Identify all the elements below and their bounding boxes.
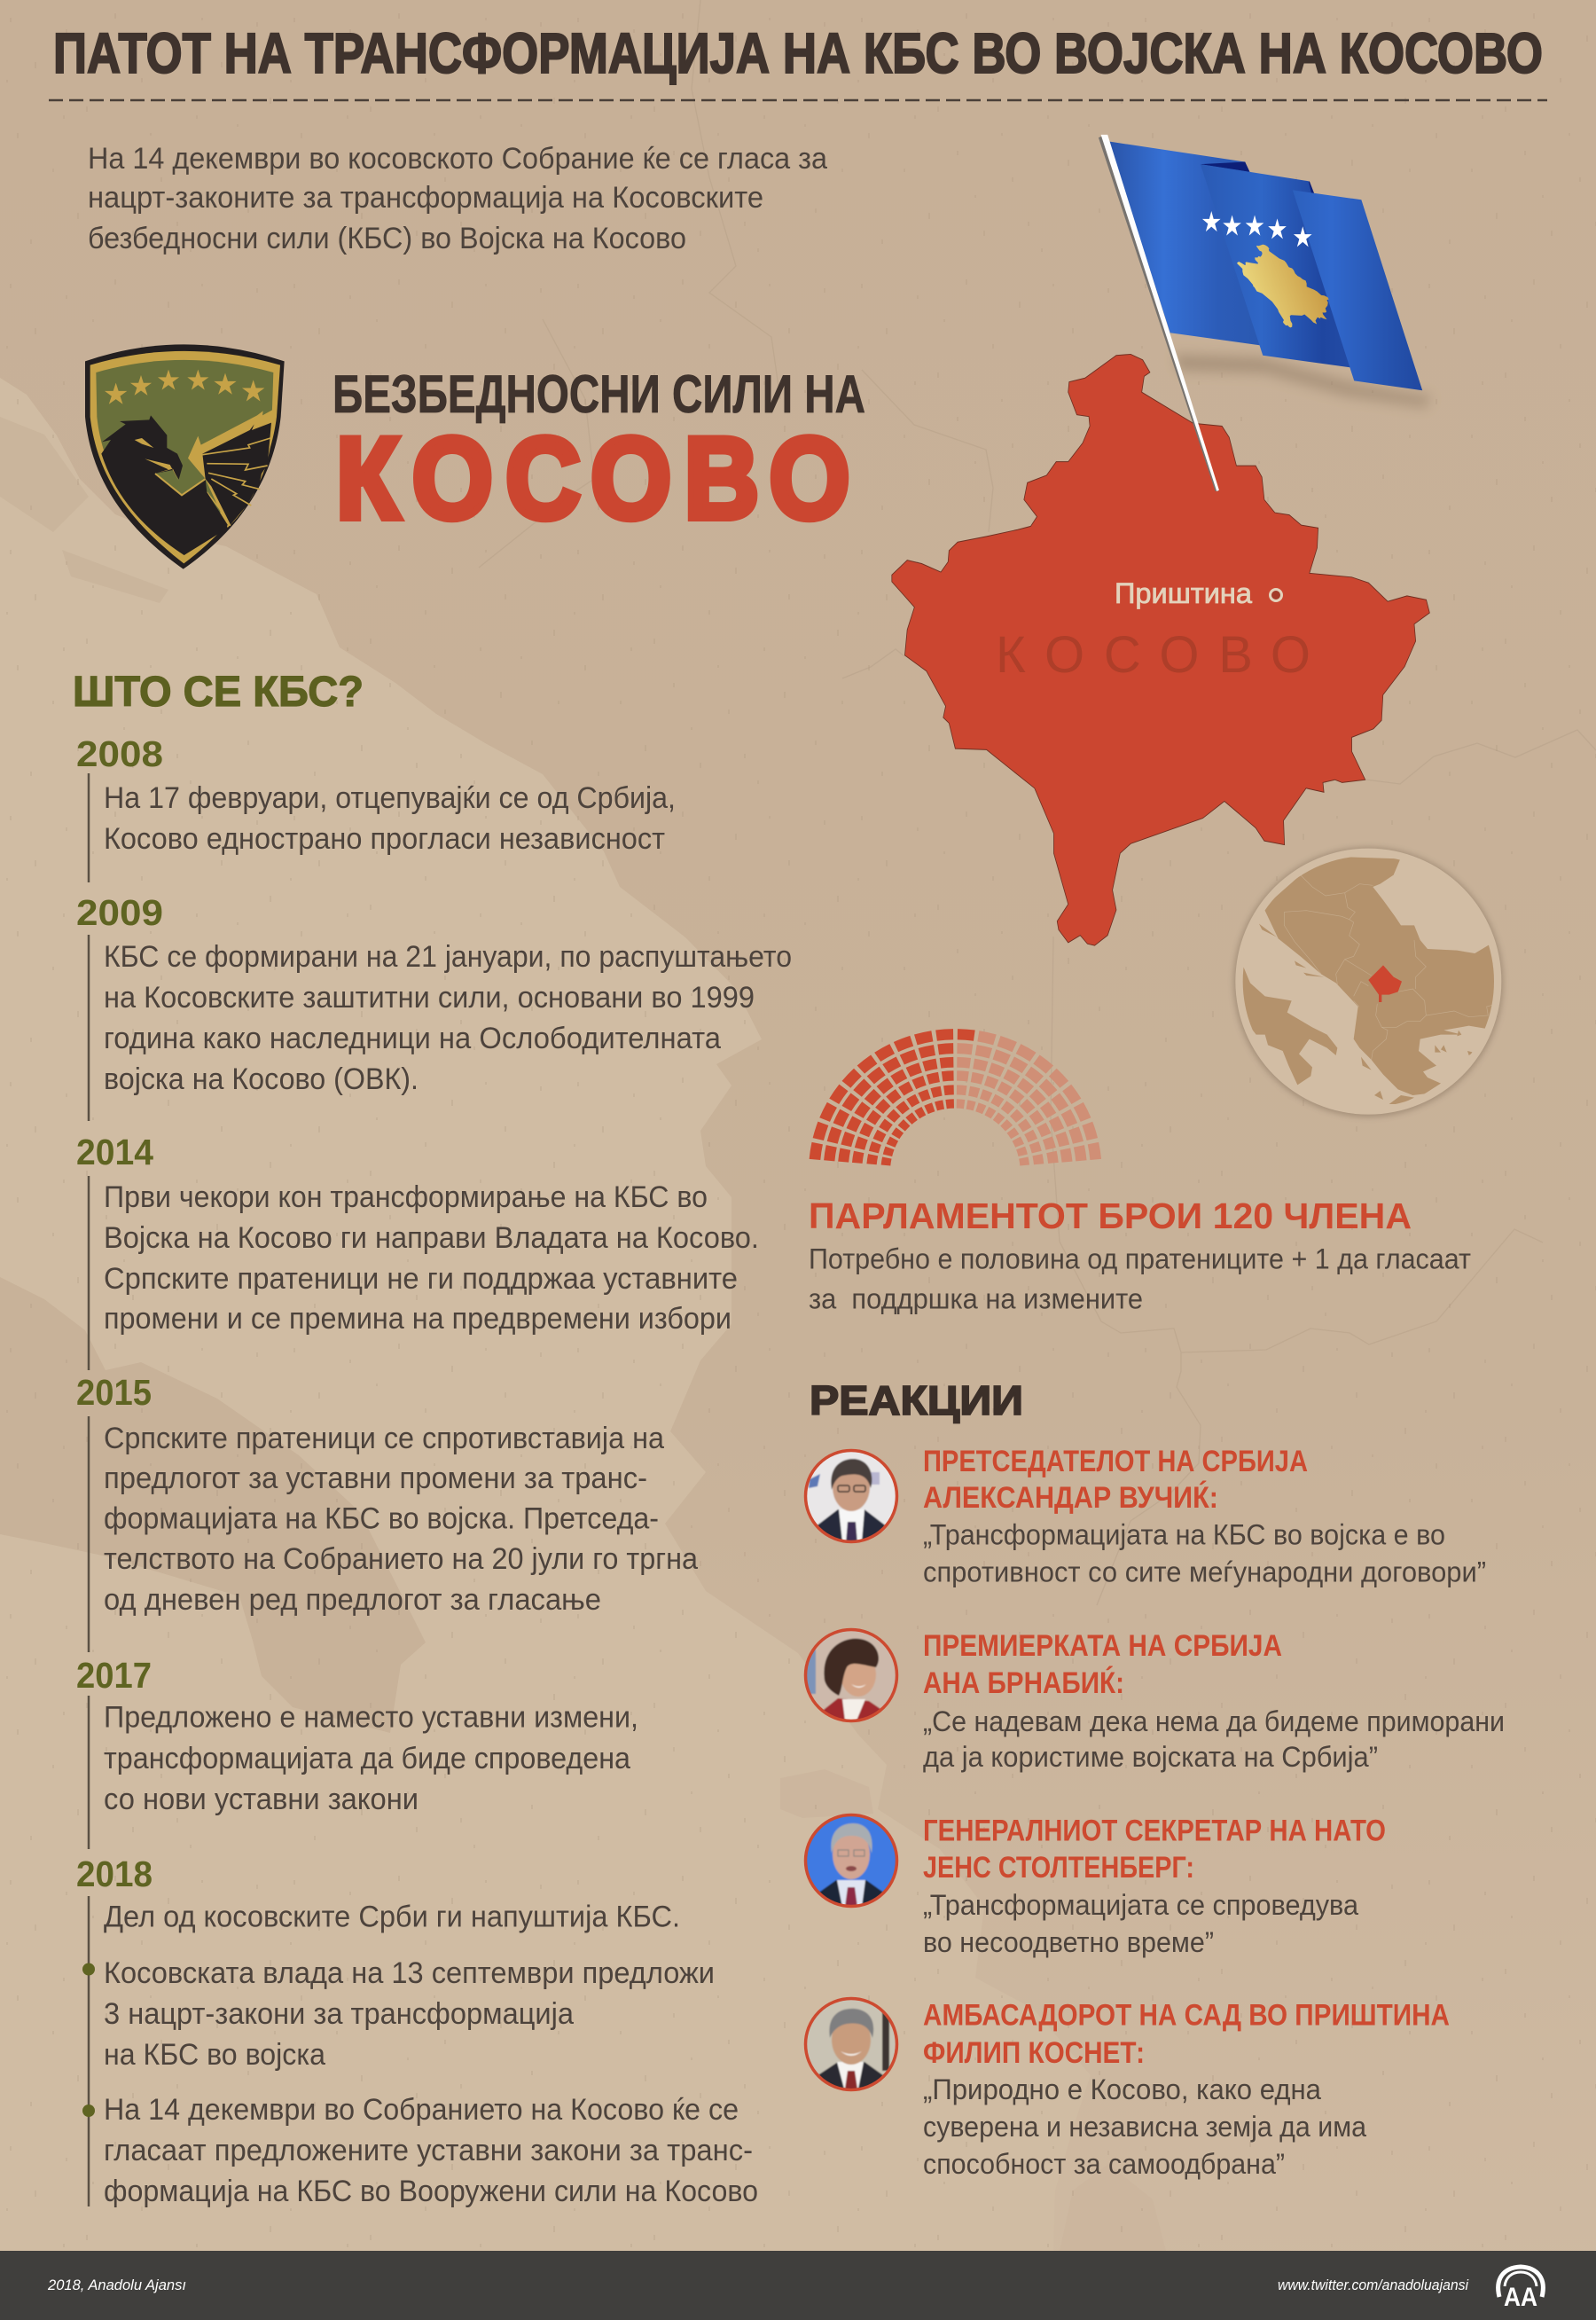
quote: Kosnett — [923, 1999, 1450, 2180]
quote: Stoltenberg: ЈЕНС СТОЛТЕНБЕРГ: — [923, 1851, 1194, 1885]
quote: Brnabić — [923, 1629, 1505, 1773]
parliament text: Потребно е половина од пратениците + 1 да гласаат — [809, 1243, 1471, 1275]
timeline 2018: На 14 декември во Собранието на Косово ќе се — [104, 2093, 739, 2127]
parliament heading: ПАРЛАМЕНТОТ БРОИ 120 ЧЛЕНА — [809, 1195, 1412, 1236]
quote: Stoltenberg: ГЕНЕРАЛНИОТ СЕКРЕТАР НА НАТО — [923, 1814, 1386, 1847]
timeline 2009: војска на Косово (ОВК). — [104, 1062, 419, 1096]
heading: what is KSF: ШТО СЕ КБС? — [73, 669, 364, 716]
icon: AA logo: AA — [1504, 2283, 1537, 2312]
timeline 2017 — [76, 1655, 638, 1849]
quote: Stoltenberg: „Трансформацијата се спроведува — [923, 1889, 1358, 1921]
quote: Kosnett: ФИЛИП КОСНЕТ: — [923, 2036, 1145, 2070]
quote: Vučić: „Трансформацијата на КБС во војска е во — [923, 1518, 1445, 1550]
map: Kosovo with flag — [892, 135, 1434, 945]
intro text: безбедносни сили (КБС) во Војска на Косово — [88, 222, 686, 255]
quote: Vučić: АЛЕКСАНДАР ВУЧИЌ: — [923, 1481, 1218, 1515]
timeline 2008: Косово еднострано прогласи независност — [104, 822, 665, 856]
intro text: нацрт-законите за трансформација на Косовските — [88, 181, 763, 215]
quote: Kosnett: „Природно е Косово, како една — [923, 2073, 1321, 2105]
parliament text — [809, 1243, 1471, 1315]
icon: AA logo — [1498, 2267, 1543, 2312]
quote: Vučić — [923, 1445, 1486, 1588]
timeline 2018: Дел од косовските Срби ги напуштија КБС. — [104, 1901, 680, 1934]
intro text — [88, 142, 827, 255]
reactions heading: РЕАКЦИИ — [810, 1377, 1023, 1423]
intro text: На 14 декември во косовското Собрание ќе се гласа за — [88, 142, 827, 176]
footer bar: www.twitter.com/anadoluajansi — [1278, 2277, 1469, 2293]
portrait: Brnabić — [802, 1626, 900, 1725]
timeline 2017: со нови уставни закони — [104, 1783, 419, 1816]
timeline 2009: КБС се формирани на 21 јануари, по распуштањето — [104, 940, 792, 974]
portrait: Stoltenberg — [802, 1812, 900, 1911]
timeline 2018: на КБС во војска — [104, 2038, 325, 2072]
footer bar — [0, 2251, 1596, 2320]
timeline 2015: предлогот за уставни промени за транс- — [104, 1462, 647, 1495]
timeline 2008 — [76, 733, 676, 882]
quote: Kosnett: АМБАСАДОРОТ НА САД ВО ПРИШТИНА — [923, 1999, 1450, 2033]
timeline 2015: од дневен ред предлогот за гласање — [104, 1583, 601, 1617]
timeline 2015 — [76, 1372, 698, 1652]
label: Kosovo on map: КОСОВО — [996, 626, 1310, 684]
icon: KSF shield emblem — [85, 344, 285, 569]
quote: Stoltenberg: во несоодветно време” — [923, 1926, 1214, 1958]
timeline 2008: 2008 — [76, 733, 163, 774]
timeline 2009: 2009 — [76, 892, 163, 933]
flag shadow — [1174, 356, 1434, 406]
timeline 2018: Косовската влада на 13 септември предложи — [104, 1956, 715, 1990]
timeline 2015: телството на Собранието на 20 јули го тргна — [104, 1542, 698, 1576]
timeline 2009: на Косовските заштитни сили, основани во 1999 — [104, 981, 755, 1015]
quote: Brnabić: АНА БРНАБИЌ: — [923, 1666, 1124, 1700]
portrait: Vučić — [802, 1447, 900, 1548]
label: Pristina: Приштина — [1115, 577, 1252, 609]
timeline 2014 — [76, 1132, 759, 1370]
quote: Vučić: спротивност со сите меѓународни договори” — [923, 1556, 1486, 1588]
quote: Stoltenberg — [923, 1814, 1386, 1958]
timeline 2018 — [76, 1854, 758, 2208]
quote: Kosnett: способност за самоодбрана” — [923, 2148, 1285, 2180]
timeline 2018: 2018 — [76, 1854, 153, 1894]
timeline 2018: гласаат предложените уставни закони за транс- — [104, 2134, 753, 2167]
timeline 2014: промени и се премина на предвремени избори — [104, 1302, 732, 1336]
timeline 2014: Војска на Косово ги направи Владата на Косово. — [104, 1221, 759, 1255]
timeline 2015: формацијата на КБС во војска. Претседа- — [104, 1502, 659, 1536]
quote: Brnabić: ПРЕМИЕРКАТА НА СРБИЈА — [923, 1629, 1282, 1663]
timeline 2017: трансформацијата да биде спроведена — [104, 1742, 630, 1775]
heading: security forces: БЕЗБЕДНОСНИ СИЛИ НА — [332, 364, 865, 424]
timeline 2015: 2015 — [76, 1372, 152, 1413]
timeline 2009: година како наследници на Ослободителната — [104, 1022, 721, 1055]
parliament text: за поддршка на измените — [809, 1283, 1143, 1315]
timeline 2009 — [76, 892, 792, 1121]
chart: parliament seats — [815, 1034, 1096, 1166]
heading: Kosovo: КОСОВО — [336, 414, 863, 543]
Kosovo shape — [892, 354, 1429, 945]
quote: Kosnett: суверена и независна земја да има — [923, 2111, 1366, 2143]
Kosovo flag — [1109, 142, 1422, 390]
timeline 2008: На 17 февруари, отцепувајќи се од Србија, — [104, 781, 676, 815]
quote: Brnabić: „Се надевам дека нема да бидеме приморани — [923, 1705, 1505, 1737]
timeline 2014: Први чекори кон трансформирање на КБС во — [104, 1180, 708, 1214]
locator globe — [1233, 847, 1503, 1117]
timeline 2018: 3 нацрт-закони за трансформација — [104, 1997, 574, 2031]
flag pole — [1099, 135, 1219, 491]
quote: Brnabić: да ја користиме војската на Србија” — [923, 1741, 1378, 1773]
timeline 2017: Предложено е наместо уставни измени, — [104, 1701, 638, 1735]
timeline 2018: формација на КБС во Вооружени сили на Косово — [104, 2175, 758, 2208]
timeline 2015: Српските пратеници се спротивставија на — [104, 1422, 664, 1455]
timeline 2014: Српските пратеници не ги поддржаа уставните — [104, 1262, 738, 1296]
portrait: Kosnett — [802, 1995, 900, 2093]
timeline 2017: 2017 — [76, 1655, 152, 1696]
timeline 2014: 2014 — [76, 1132, 153, 1172]
footer bar: 2018, Anadolu Ajansı — [47, 2277, 186, 2293]
quote: Vučić: ПРЕТСЕДАТЕЛОТ НА СРБИЈА — [923, 1445, 1308, 1478]
